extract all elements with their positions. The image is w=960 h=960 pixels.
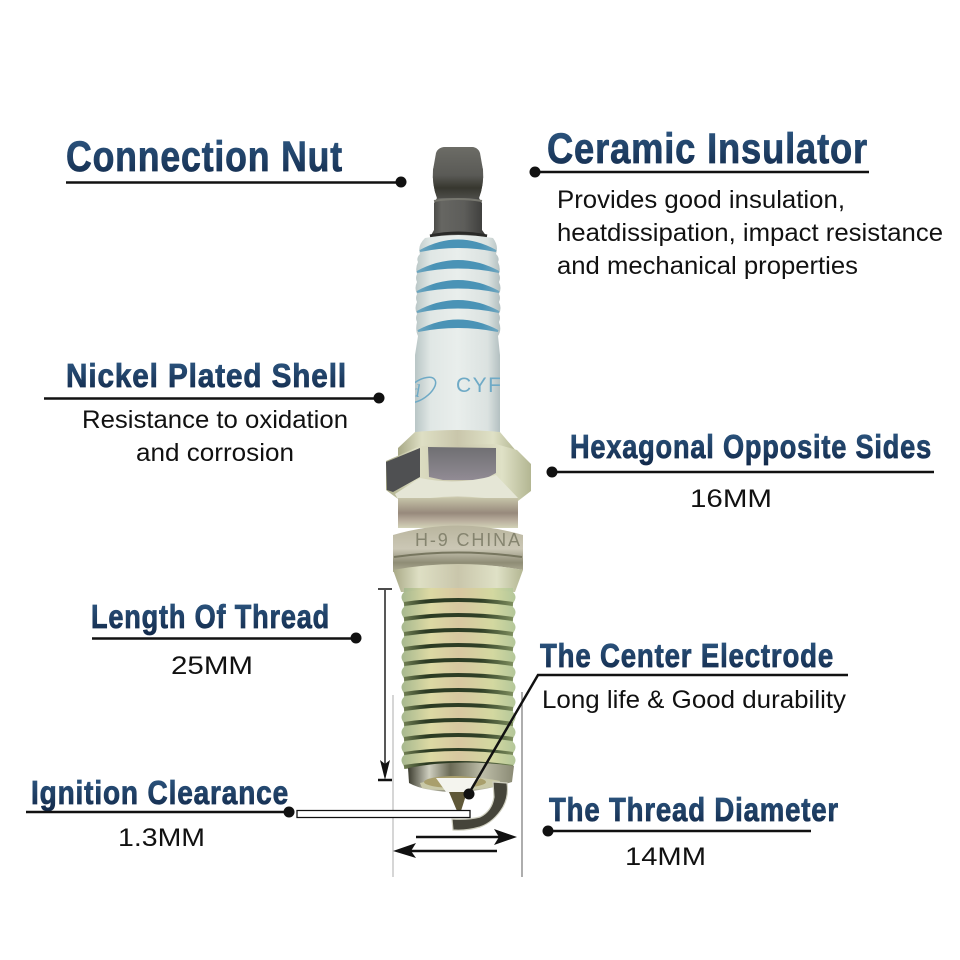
insulator markings: CYFS [456, 374, 518, 397]
connection nut terminal [430, 147, 487, 237]
center electrode [449, 792, 467, 811]
callout: ignition clearance: 1.3MM [118, 824, 205, 852]
callout: ceramic insulator [530, 125, 943, 280]
callout: the center electrode [464, 637, 848, 800]
callout: nickel plated shell: Resistance to oxidation [82, 406, 348, 434]
ground electrode [452, 782, 508, 830]
callout: the thread diameter: The Thread Diameter [549, 791, 839, 828]
callout: ceramic insulator: heatdissipation, impact resistance [557, 219, 943, 247]
callout: ceramic insulator: Ceramic Insulator [547, 125, 868, 173]
callout: length of thread: 25MM [171, 652, 253, 680]
callout: ignition clearance [26, 774, 470, 852]
callout: the center electrode: The Center Electrode [540, 637, 834, 674]
callout: nickel plated shell: and corrosion [136, 439, 294, 467]
callout: hexagonal opposite sides: 16MM [690, 485, 772, 513]
callout: length of thread [91, 598, 362, 680]
insulator markings: d [411, 381, 421, 401]
callout: the thread diameter: 14MM [625, 843, 706, 871]
callout: ignition clearance: Ignition Clearance [31, 774, 289, 811]
callout: nickel plated shell [44, 357, 384, 467]
callout: hexagonal opposite sides [546, 428, 934, 513]
threaded section [402, 588, 516, 767]
crimp band with stamp [393, 498, 523, 592]
hex collar [386, 430, 531, 506]
callout: length of thread: Length Of Thread [91, 598, 330, 635]
callout: ceramic insulator: Provides good insulation, [557, 186, 845, 214]
dimension guides and arrows [378, 589, 522, 877]
callout: nickel plated shell: Nickel Plated Shell [66, 357, 347, 394]
callout: ceramic insulator: and mechanical properties [557, 252, 858, 280]
thread end and insulator tip [408, 762, 514, 793]
insulator markings [415, 376, 500, 403]
ceramic insulator ribs [415, 235, 500, 436]
crimp band with stamp: H-9 CHINA [415, 530, 520, 550]
spark plug illustration [386, 147, 531, 830]
callout: connection nut: Connection Nut [66, 133, 343, 181]
callout: the thread diameter [542, 791, 839, 871]
callout: the center electrode: Long life & Good durability [542, 686, 847, 714]
